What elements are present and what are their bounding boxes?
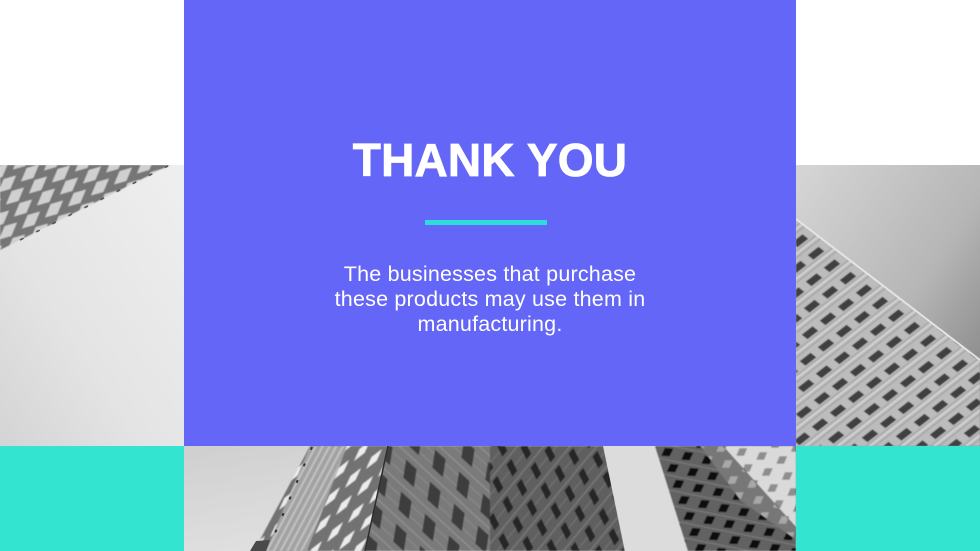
panel: purple centre — [184, 0, 796, 446]
teal block: bottom right — [796, 446, 980, 551]
teal block: bottom left — [0, 446, 184, 551]
photo: right building — [796, 165, 980, 446]
photo: bottom buildings — [184, 446, 796, 551]
body text: manufacturing. — [417, 312, 563, 336]
title: THANK YOU — [353, 134, 627, 186]
body text: these products may use them in — [335, 287, 645, 311]
body text — [334, 262, 645, 336]
divider accent — [425, 220, 547, 225]
photo: left building — [0, 165, 184, 446]
body text: The businesses that purchase — [344, 262, 636, 286]
